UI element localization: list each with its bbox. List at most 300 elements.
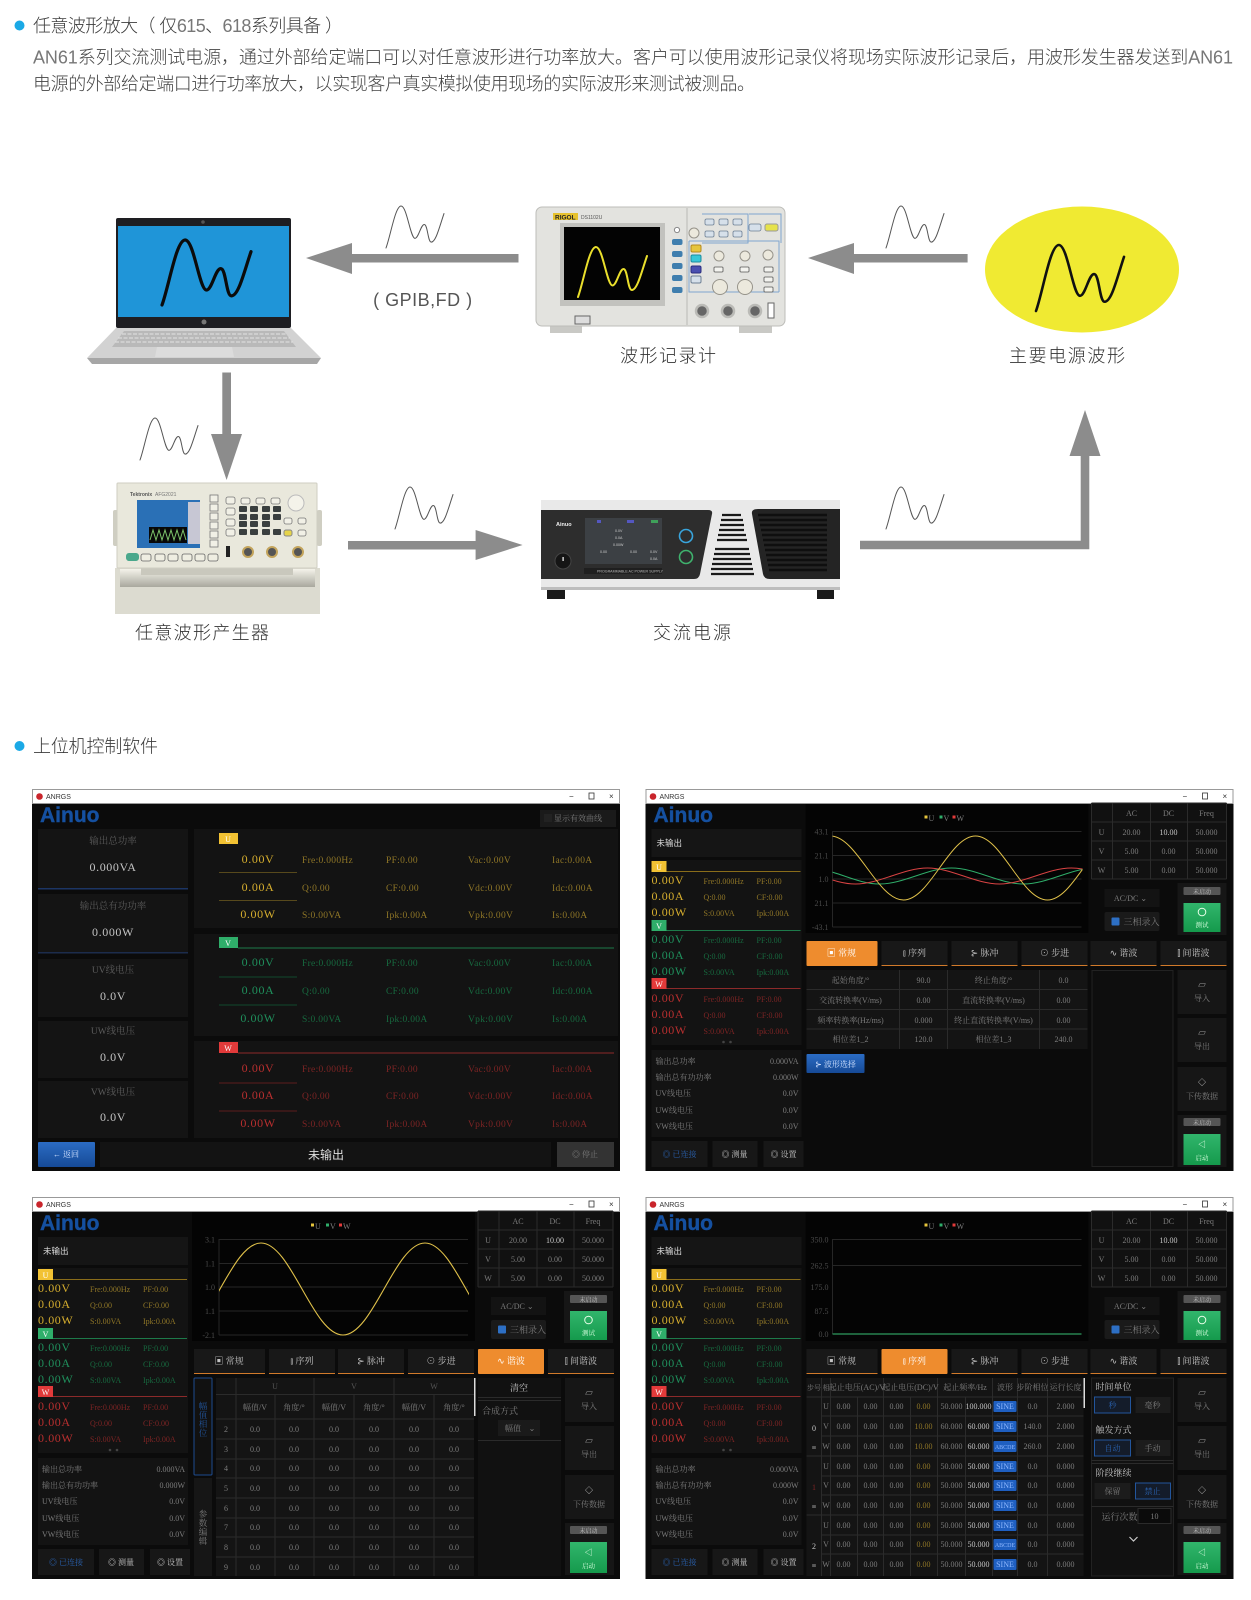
parameter table: [806, 970, 1088, 1049]
setpoint table: U: [1099, 1236, 1105, 1245]
totals list: 0.0V: [169, 1514, 185, 1523]
phase readings sidebar: [652, 1268, 802, 1453]
harmonic table: 0.0: [329, 1464, 339, 1473]
sequence table: 0.000: [1056, 1481, 1074, 1490]
setpoint table: 50.000: [582, 1274, 604, 1283]
label: waveform recorder: 波形记录计: [620, 346, 716, 366]
sequence options panel: 时间单位: [1096, 1381, 1132, 1392]
harmonic table: 0.0: [409, 1543, 419, 1552]
harmonic table: 0.0: [289, 1445, 299, 1454]
sequence table: 0.00: [836, 1481, 850, 1490]
phase readings sidebar: Fre:0.000Hz: [704, 995, 744, 1004]
panel: software screenshot, sequence settings: ×: [1222, 1200, 1228, 1209]
sequence table: 0.00: [836, 1422, 850, 1431]
sequence table: 60.000: [940, 1422, 962, 1431]
phase readings sidebar: Q:0.00: [704, 1301, 726, 1310]
panel: software screenshot, overview: ANRGS: [46, 794, 71, 801]
phase W readings: 0.00W: [240, 1116, 276, 1130]
sequence table: 0.00: [836, 1402, 850, 1411]
phase V readings: Vdc:0.00V: [468, 987, 513, 997]
sequence table: 0.00: [864, 1402, 878, 1411]
sequence options panel: 自动: [1104, 1443, 1120, 1453]
harmonic table: 0.0: [369, 1425, 379, 1434]
panel: software screenshot, overview: [32, 789, 620, 1171]
sequence table: 140.0: [1024, 1422, 1042, 1431]
phase U readings: 0.00A: [242, 880, 274, 894]
totals list: 0.0V: [783, 1122, 799, 1131]
phase W readings: Vac:0.00V: [468, 1065, 511, 1075]
phase readings sidebar: Ipk:0.00A: [143, 1317, 176, 1326]
phase readings sidebar: 0.00A: [38, 1356, 71, 1370]
harmonic table: U: [272, 1382, 278, 1391]
sequence table: SINE: [996, 1402, 1014, 1411]
navigation buttons: ◎ 测量: [108, 1557, 134, 1567]
test start panel: [564, 1291, 613, 1343]
icon: laptop: [87, 218, 321, 364]
phase U readings: Is:0.00A: [552, 911, 587, 921]
phase readings sidebar: 0.00A: [652, 1007, 684, 1021]
harmonic table: 0.0: [250, 1484, 260, 1493]
sequence table: [806, 1378, 1085, 1576]
totals list: 0.000VA: [770, 1465, 799, 1474]
test start panel: 未启动: [1193, 1296, 1211, 1304]
setpoint table: 0.00: [1162, 1274, 1176, 1283]
phase U readings: Vdc:0.00V: [468, 884, 513, 894]
totals list: 0.000VA: [156, 1465, 185, 1474]
phase U readings: Vpk:0.00V: [468, 911, 513, 921]
sequence options panel: 阶段继续: [1096, 1467, 1132, 1478]
sequence table: SINE: [996, 1521, 1014, 1530]
phase readings sidebar: CF:0.00: [143, 1419, 169, 1428]
sequence options panel: 触发方式: [1096, 1424, 1132, 1435]
sequence table: 50.000: [940, 1481, 962, 1490]
icon: AC power supply: 0.00W: [613, 543, 624, 547]
sequence table: 0.00: [916, 1462, 930, 1471]
totals list: UV线电压: [656, 1088, 691, 1098]
navigation buttons: ◎ 已连接: [662, 1557, 696, 1567]
bottom control bar: 未输出: [308, 1147, 344, 1162]
action buttons: ▱: [1198, 1389, 1206, 1398]
setpoint table: [1092, 1211, 1226, 1287]
phase U readings: Ipk:0.00A: [386, 911, 428, 921]
totals list: 0.0V: [783, 1089, 799, 1098]
sequence table: ABCDE: [995, 1445, 1015, 1451]
icon: AC power supply: [541, 500, 840, 599]
bottom control bar: ← 返回: [53, 1149, 79, 1159]
phase readings sidebar: 0.00A: [652, 948, 684, 962]
setpoint table: 20.00: [1122, 828, 1140, 837]
phase readings sidebar: Fre:0.000Hz: [704, 877, 744, 886]
action buttons: 未启动: [1193, 1527, 1211, 1535]
navigation buttons: [38, 1549, 190, 1575]
harmonic table: 0.0: [409, 1563, 419, 1572]
line chart: sine waveform: -2.1: [202, 1331, 215, 1340]
harmonic table: 0.0: [329, 1543, 339, 1552]
output status: 未输出: [656, 1246, 682, 1256]
harmonic table: 0.0: [369, 1464, 379, 1473]
label: GPIB,FD: ( GPIB,FD ): [373, 290, 472, 310]
harmonic table: 0.0: [369, 1484, 379, 1493]
icon: arbitrary waveform generator: AFG2021: [155, 492, 177, 498]
setpoint table: Freq: [586, 1217, 600, 1226]
line chart: three-phase waveforms: U: [928, 814, 934, 823]
totals list: 0.0V: [783, 1514, 799, 1523]
phase readings sidebar: CF:0.00: [143, 1301, 169, 1310]
action buttons: ◇: [1198, 1078, 1206, 1087]
sequence table: 50.000: [968, 1540, 990, 1549]
phase U readings: CF:0.00: [386, 884, 419, 894]
sequence table: 0.000: [1056, 1462, 1074, 1471]
action buttons: 未启动: [1193, 1119, 1211, 1127]
sequence table: 0.00: [864, 1442, 878, 1451]
tab bar: ∿ 谐波: [497, 1355, 525, 1366]
harmonic table: 0.0: [289, 1464, 299, 1473]
setpoint table: DC: [1163, 1217, 1174, 1226]
tab bar: ⫿ 间谐波: [565, 1355, 597, 1366]
sequence table: 50.000: [940, 1521, 962, 1530]
phase V readings: PF:0.00: [386, 959, 418, 969]
sequence table: 60.000: [968, 1442, 990, 1451]
sequence table: 起止频率/Hz: [943, 1382, 987, 1392]
sequence table: 2.000: [1056, 1442, 1074, 1451]
parameter table: 相位差1_3: [976, 1034, 1012, 1044]
phase readings sidebar: V: [43, 1330, 49, 1339]
totals list: UV线电压: [656, 1496, 691, 1506]
sequence table: 0.0: [1028, 1462, 1038, 1471]
phase readings sidebar: PF:0.00: [143, 1403, 168, 1412]
phase readings sidebar: S:0.00VA: [704, 968, 735, 977]
sequence table: 0.000: [1056, 1560, 1074, 1569]
sequence options panel: 秒: [1108, 1400, 1118, 1410]
setpoint table: 20.00: [1122, 1236, 1140, 1245]
vertical mode tabs: 数: [199, 1518, 208, 1528]
setpoint table: 50.000: [1196, 828, 1218, 837]
harmonic table: 0.0: [250, 1504, 260, 1513]
icon: AC power supply: Ainuo: [556, 522, 572, 528]
sequence table: 0.00: [864, 1560, 878, 1569]
phase readings sidebar: Ipk:0.00A: [756, 1027, 789, 1036]
parameter table: 直流转换率(V/ms): [962, 995, 1025, 1005]
label: AC power supply: 交流电源: [653, 623, 731, 643]
setpoint table: U: [485, 1236, 491, 1245]
sequence table: 起止电压(DC)/V: [882, 1382, 939, 1392]
harmonic table: 0.0: [369, 1563, 379, 1572]
harmonic table: 0.0: [449, 1445, 459, 1454]
phase U readings: Fre:0.000Hz: [302, 856, 353, 866]
phase U readings: Idc:0.00A: [552, 884, 593, 894]
sequence table: 0.00: [864, 1422, 878, 1431]
sequence table: 0.00: [890, 1422, 904, 1431]
harmonic table: 0.0: [449, 1484, 459, 1493]
totals list: 0.000W: [159, 1481, 185, 1490]
harmonic table: 0.0: [449, 1523, 459, 1532]
sequence table: 100.000: [966, 1402, 992, 1411]
totals list: 输出总有功功率: [656, 1072, 712, 1082]
button: show valid curves: [540, 810, 616, 827]
harmonic table: W: [430, 1382, 438, 1391]
vertical mode tabs: 幅: [199, 1401, 208, 1411]
totals list: [652, 1050, 802, 1137]
phase readings sidebar: S:0.00VA: [704, 1317, 735, 1326]
phase readings sidebar: 0.00A: [652, 1297, 684, 1311]
panel: software screenshot, general settings: [646, 789, 1234, 1171]
logo: Ainuo: [40, 804, 99, 827]
icon: AC power supply: 0.00: [630, 550, 637, 554]
sequence table: 50.000: [968, 1462, 990, 1471]
phase readings sidebar: Q:0.00: [90, 1360, 112, 1369]
phase readings sidebar: PF:0.00: [756, 936, 782, 945]
phase W readings: 0.00V: [242, 1061, 274, 1075]
phase readings sidebar: 0.00W: [652, 964, 687, 978]
parameter table: 0.00: [1056, 996, 1070, 1005]
setpoint table: 50.000: [1196, 1255, 1218, 1264]
setpoint table: W: [1098, 1274, 1106, 1283]
harmonic table: 0.0: [250, 1425, 260, 1434]
arrow: source to oscilloscope: [808, 243, 968, 274]
setpoint table: Freq: [1199, 1217, 1214, 1226]
metric panels: 0.0V: [100, 989, 126, 1003]
icon: AC power supply: 0.0A: [650, 557, 658, 561]
harmonic options panel: ⌄: [529, 1424, 535, 1433]
phase readings sidebar: Q:0.00: [90, 1419, 112, 1428]
harmonic table: 0.0: [409, 1504, 419, 1513]
phase U readings: U: [225, 835, 231, 844]
phase readings sidebar: CF:0.00: [756, 1011, 783, 1020]
parameter table: 相位差1_2: [832, 1034, 868, 1044]
tab bar: [806, 941, 1226, 966]
setpoint table: V: [1099, 1255, 1105, 1264]
sequence table: 0.000: [1056, 1540, 1074, 1549]
waveform sketch beside arrow: [140, 418, 198, 460]
harmonic table: 0.0: [289, 1523, 299, 1532]
output status: [38, 1237, 188, 1265]
action buttons: 导入: [1194, 1401, 1210, 1411]
waveform select button: [806, 1054, 864, 1073]
phase readings sidebar: Q:0.00: [704, 952, 726, 961]
harmonic table: 0.0: [289, 1543, 299, 1552]
navigation buttons: ◎ 设置: [770, 1149, 796, 1159]
totals list: VW线电压: [656, 1121, 693, 1131]
line chart: three-phase waveforms: 43.1: [814, 828, 828, 836]
action buttons: 导入: [581, 1401, 597, 1411]
harmonic table: 0.0: [329, 1504, 339, 1513]
line chart: sine waveform: 3.1: [205, 1236, 215, 1244]
empty side panel: [1092, 970, 1173, 1166]
phase W readings: Fre:0.000Hz: [302, 1065, 353, 1075]
tab bar: ⊙ 步进: [1040, 1355, 1069, 1366]
parameter table: 起始角度/°: [832, 975, 869, 985]
sequence table: 10.00: [914, 1422, 932, 1431]
parameter table: 0.000: [914, 1016, 932, 1025]
harmonic table: 0.0: [449, 1504, 459, 1513]
harmonic table: 0.0: [409, 1523, 419, 1532]
sequence table: 0.00: [890, 1560, 904, 1569]
tab bar: ⫿ 间谐波: [1177, 1355, 1210, 1366]
phase W readings: Vpk:0.00V: [468, 1120, 513, 1130]
label: arbitrary waveform generator: 任意波形产生器: [135, 623, 269, 643]
harmonic table: 0.0: [329, 1425, 339, 1434]
harmonic options panel: [478, 1378, 561, 1576]
setpoint table: [1092, 803, 1226, 879]
phase readings sidebar: S:0.00VA: [704, 1376, 735, 1385]
mode selector: 三相录入: [1124, 916, 1160, 927]
action buttons: ▱: [1198, 981, 1206, 990]
phase readings sidebar: Q:0.00: [704, 1011, 726, 1020]
harmonic table: 0.0: [250, 1563, 260, 1572]
totals list: 0.0V: [783, 1497, 799, 1506]
phase readings sidebar: S:0.00VA: [704, 1027, 735, 1036]
sequence table: 0.00: [916, 1501, 930, 1510]
setpoint table: 0.00: [1162, 866, 1176, 875]
metric panels: UW线电压: [91, 1025, 136, 1037]
sequence table: 0.00: [864, 1540, 878, 1549]
sequence table: V: [823, 1540, 829, 1549]
parameter table: 120.0: [914, 1035, 932, 1044]
phase W readings: PF:0.00: [386, 1065, 418, 1075]
phase readings sidebar: [652, 860, 802, 1045]
line chart: flat output: [806, 1212, 1088, 1341]
sequence table: SINE: [996, 1462, 1014, 1471]
action buttons: [1178, 970, 1226, 1167]
phase readings sidebar: Q:0.00: [704, 893, 726, 902]
metric panels: 输出总有功功率: [80, 900, 147, 912]
tab bar: ▣ 常规: [827, 947, 856, 958]
harmonic table: 0.0: [250, 1445, 260, 1454]
tab bar: [806, 1349, 1226, 1374]
setpoint table: Freq: [1199, 809, 1214, 818]
waveform sketch above arrow: [395, 487, 453, 529]
tab bar: ▣ 常规: [214, 1355, 244, 1366]
sequence table: W: [822, 1442, 830, 1451]
tab bar: ∿ 谐波: [1110, 947, 1137, 958]
sequence options panel: 手动: [1144, 1443, 1160, 1453]
line chart: sine waveform: U: [315, 1222, 321, 1231]
tab bar: [194, 1349, 614, 1374]
phase readings sidebar: 0.00W: [38, 1372, 73, 1386]
line chart: flat output: 350.0: [810, 1236, 828, 1244]
phase V readings: 0.00V: [242, 955, 274, 969]
sequence table: 0.00: [836, 1521, 850, 1530]
phase readings sidebar: S:0.00VA: [90, 1317, 121, 1326]
totals list: VW线电压: [42, 1529, 79, 1539]
output status: 未输出: [43, 1246, 69, 1256]
metric panels: 0.0V: [100, 1110, 126, 1124]
tab bar: ∿ 谐波: [1110, 1355, 1137, 1366]
totals list: 0.0V: [169, 1530, 185, 1539]
harmonic table: 0.0: [409, 1464, 419, 1473]
setpoint table: U: [1099, 828, 1105, 837]
harmonic table: [216, 1378, 476, 1576]
sequence table: 50.000: [968, 1501, 990, 1510]
setpoint table: 0.00: [1162, 847, 1176, 856]
icon: mains power waveform: [985, 206, 1179, 332]
harmonic table: 0.0: [250, 1543, 260, 1552]
label: mains power waveform: 主要电源波形: [1009, 346, 1125, 366]
harmonic table: 8: [224, 1543, 228, 1552]
mode selector: 三相录入: [1124, 1324, 1160, 1335]
harmonic table: 0.0: [289, 1504, 299, 1513]
icon: oscilloscope: DS1102U: [581, 215, 603, 221]
action buttons: ▱: [1198, 1437, 1206, 1446]
harmonic table: V: [351, 1382, 357, 1391]
sequence table: 2.000: [1056, 1422, 1074, 1431]
phase U readings: [194, 829, 618, 928]
totals list: 输出总功率: [656, 1464, 696, 1474]
action buttons: [565, 1378, 614, 1575]
harmonic options panel: 合成方式: [482, 1405, 518, 1416]
phase W readings: Vdc:0.00V: [468, 1092, 513, 1102]
sequence table: 步号: [807, 1383, 821, 1392]
phase V readings: V: [225, 939, 231, 948]
waveform sketch above arrow: [386, 206, 444, 248]
sequence table: 50.000: [968, 1481, 990, 1490]
phase V readings: [194, 934, 618, 1036]
phase readings sidebar: CF:0.00: [143, 1360, 169, 1369]
phase readings sidebar: Fre:0.000Hz: [704, 1403, 744, 1412]
line chart: sine waveform: 1.1: [205, 1307, 215, 1316]
action buttons: ◁: [1198, 1140, 1206, 1149]
tab bar: ⊙ 步进: [1040, 947, 1069, 958]
harmonic table: 3: [224, 1445, 228, 1454]
action buttons: 下传数据: [1186, 1091, 1218, 1101]
sequence table: 0.00: [890, 1501, 904, 1510]
phase readings sidebar: 0.00W: [652, 1023, 687, 1037]
setpoint table: 20.00: [509, 1236, 527, 1245]
waveform sketch above arrow: [886, 487, 944, 529]
phase readings sidebar: 0.00V: [652, 991, 684, 1005]
setpoint table: AC: [512, 1217, 524, 1226]
sequence table: 60.000: [940, 1442, 962, 1451]
harmonic table: 0.0: [449, 1425, 459, 1434]
sequence table: 相: [822, 1383, 830, 1392]
setpoint table: 10.00: [1160, 1236, 1178, 1245]
sequence table: U: [823, 1462, 829, 1471]
action buttons: ▱: [1198, 1029, 1206, 1038]
phase W readings: CF:0.00: [386, 1092, 419, 1102]
phase readings sidebar: CF:0.00: [756, 1360, 783, 1369]
phase W readings: [194, 1041, 618, 1138]
panel: software screenshot, harmonic settings: [32, 1197, 620, 1579]
panel: software screenshot, overview: ×: [609, 792, 614, 801]
metric panels: VW线电压: [91, 1086, 136, 1098]
phase U readings: S:0.00VA: [302, 911, 341, 921]
mode selector: AC/DC ⌄: [500, 1302, 534, 1311]
logo: Ainuo: [40, 1212, 99, 1235]
phase readings sidebar: PF:0.00: [756, 1344, 782, 1353]
line chart: three-phase waveforms: 21.1: [814, 899, 828, 908]
phase readings sidebar: 0.00V: [652, 1340, 684, 1354]
setpoint table: 50.000: [1196, 866, 1218, 875]
setpoint table: AC: [1126, 809, 1137, 818]
section heading: arbitrary waveform amplification: 任意波形放大（ 仅615、618系列具备 ）: [33, 16, 343, 36]
totals list: 输出总有功功率: [42, 1480, 98, 1490]
sequence table: ≡: [812, 1502, 817, 1511]
phase readings sidebar: PF:0.00: [756, 1403, 782, 1412]
setpoint table: [478, 1211, 613, 1287]
icon: AC power supply: PROGRAMMABLE AC POWER SUPPLY: [597, 570, 664, 574]
totals list: UW线电压: [656, 1513, 693, 1523]
setpoint table: 10.00: [1160, 828, 1178, 837]
harmonic table: 0.0: [289, 1563, 299, 1572]
phase U readings: PF:0.00: [386, 856, 418, 866]
setpoint table: 5.00: [1124, 1255, 1138, 1264]
vertical mode tabs: [194, 1378, 212, 1576]
sequence table: 0.00: [916, 1560, 930, 1569]
tab bar: ⊙ 步进: [426, 1355, 456, 1366]
sequence table: 50.000: [940, 1560, 962, 1569]
arrow: generator to AC source: [348, 530, 523, 560]
mode selector: 三相录入: [510, 1324, 546, 1335]
